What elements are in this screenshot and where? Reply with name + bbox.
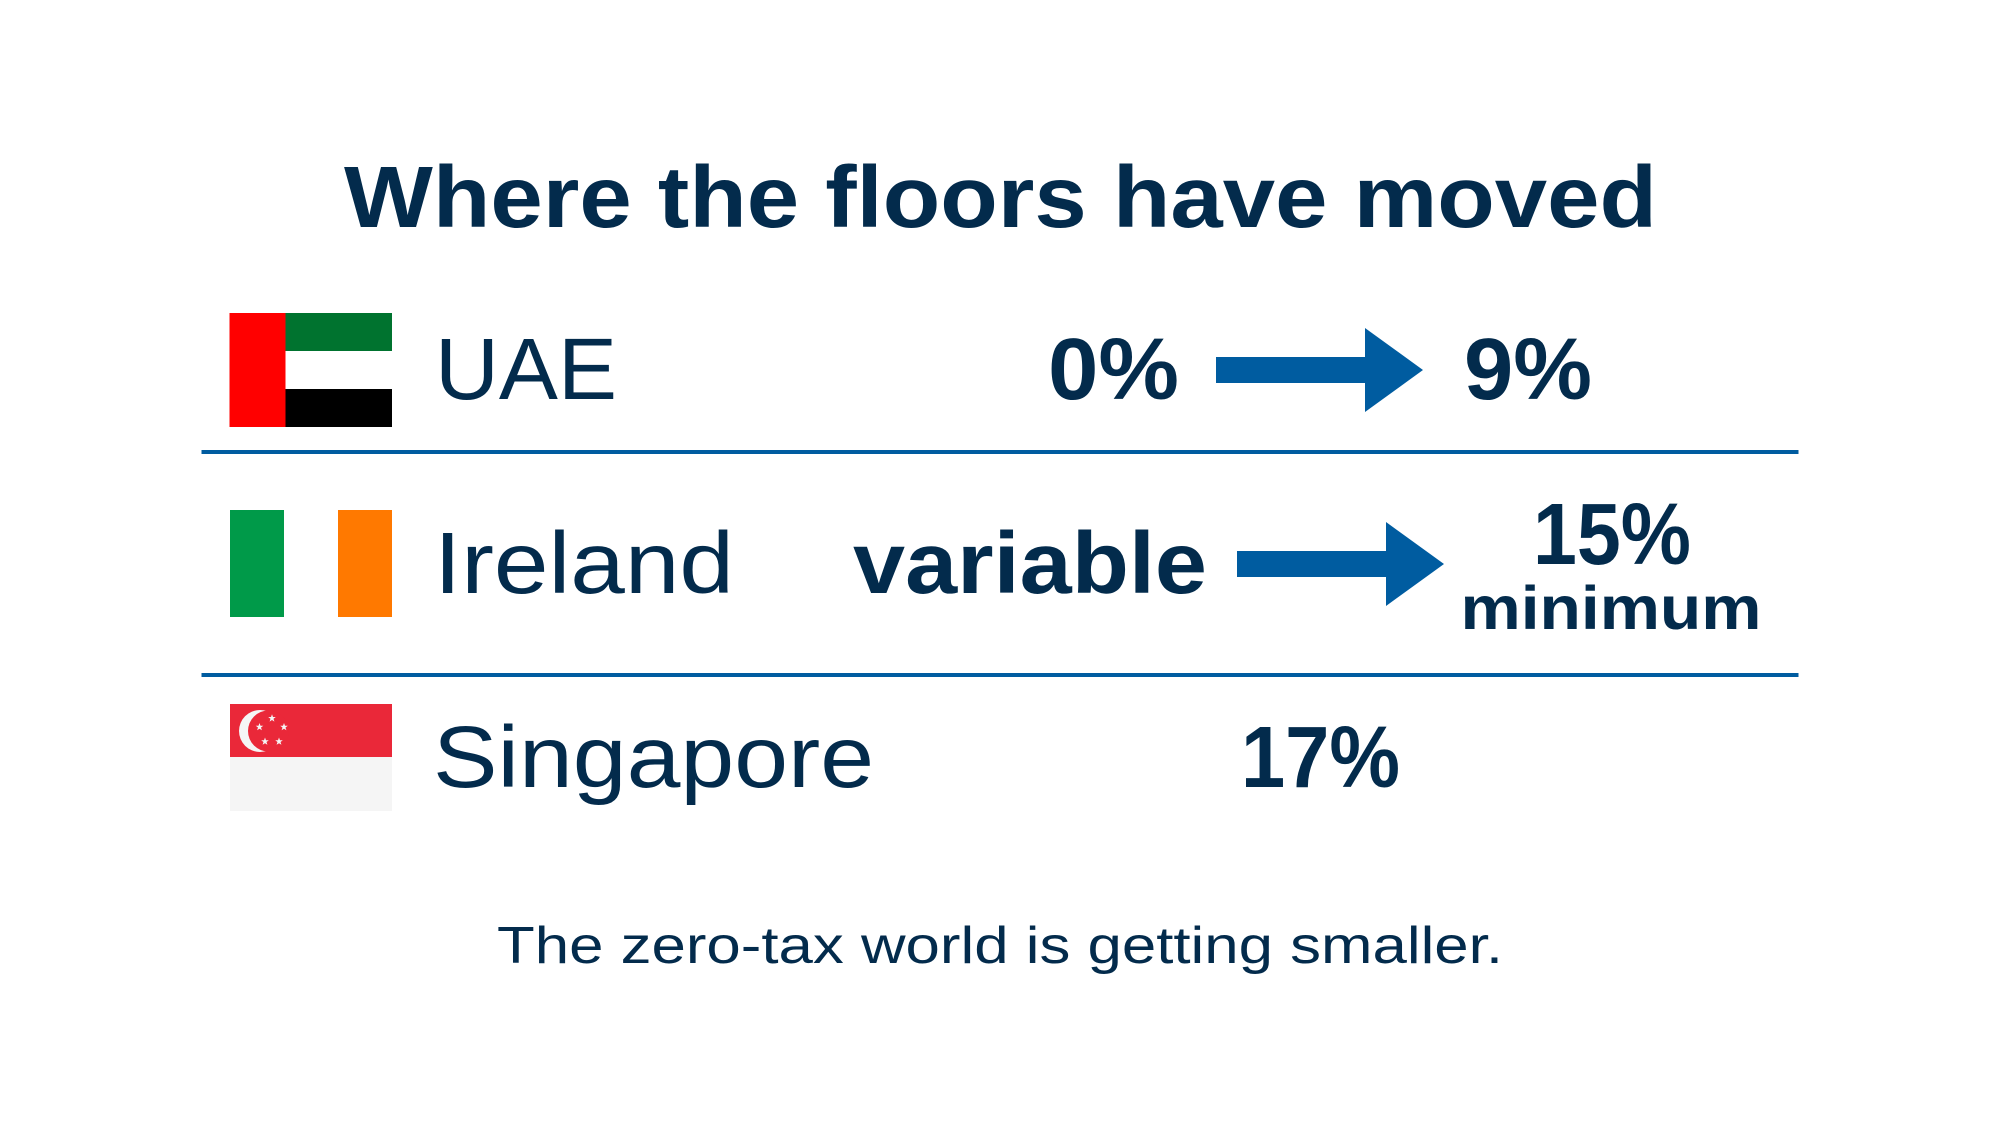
caption: The zero-tax world is getting smaller. [497,917,1503,975]
icon: Singapore flag [230,704,392,811]
label: UAE: UAE [435,321,617,418]
label: Ireland: Ireland [434,515,734,612]
row: Ireland [230,486,1762,642]
arrow: Ireland [1237,522,1444,606]
divider [202,673,1798,677]
row: Singapore [230,704,1400,811]
value: 9%: 9% [1464,321,1592,418]
label: Singapore: Singapore [433,709,874,806]
title: Where the floors have moved [344,149,1657,246]
divider [202,450,1798,454]
icon: UAE flag [230,313,392,427]
value: 0%: 0% [1048,321,1179,418]
arrow: UAE [1216,328,1423,412]
icon: Ireland flag [230,510,392,617]
value: 15% minimum: 15% [1533,486,1691,583]
value: 15% minimum: minimum [1460,574,1762,642]
value: variable: variable [853,515,1207,612]
value: 15% minimum [1460,486,1762,642]
value: 17%: 17% [1241,709,1400,806]
row: UAE [230,313,1592,427]
